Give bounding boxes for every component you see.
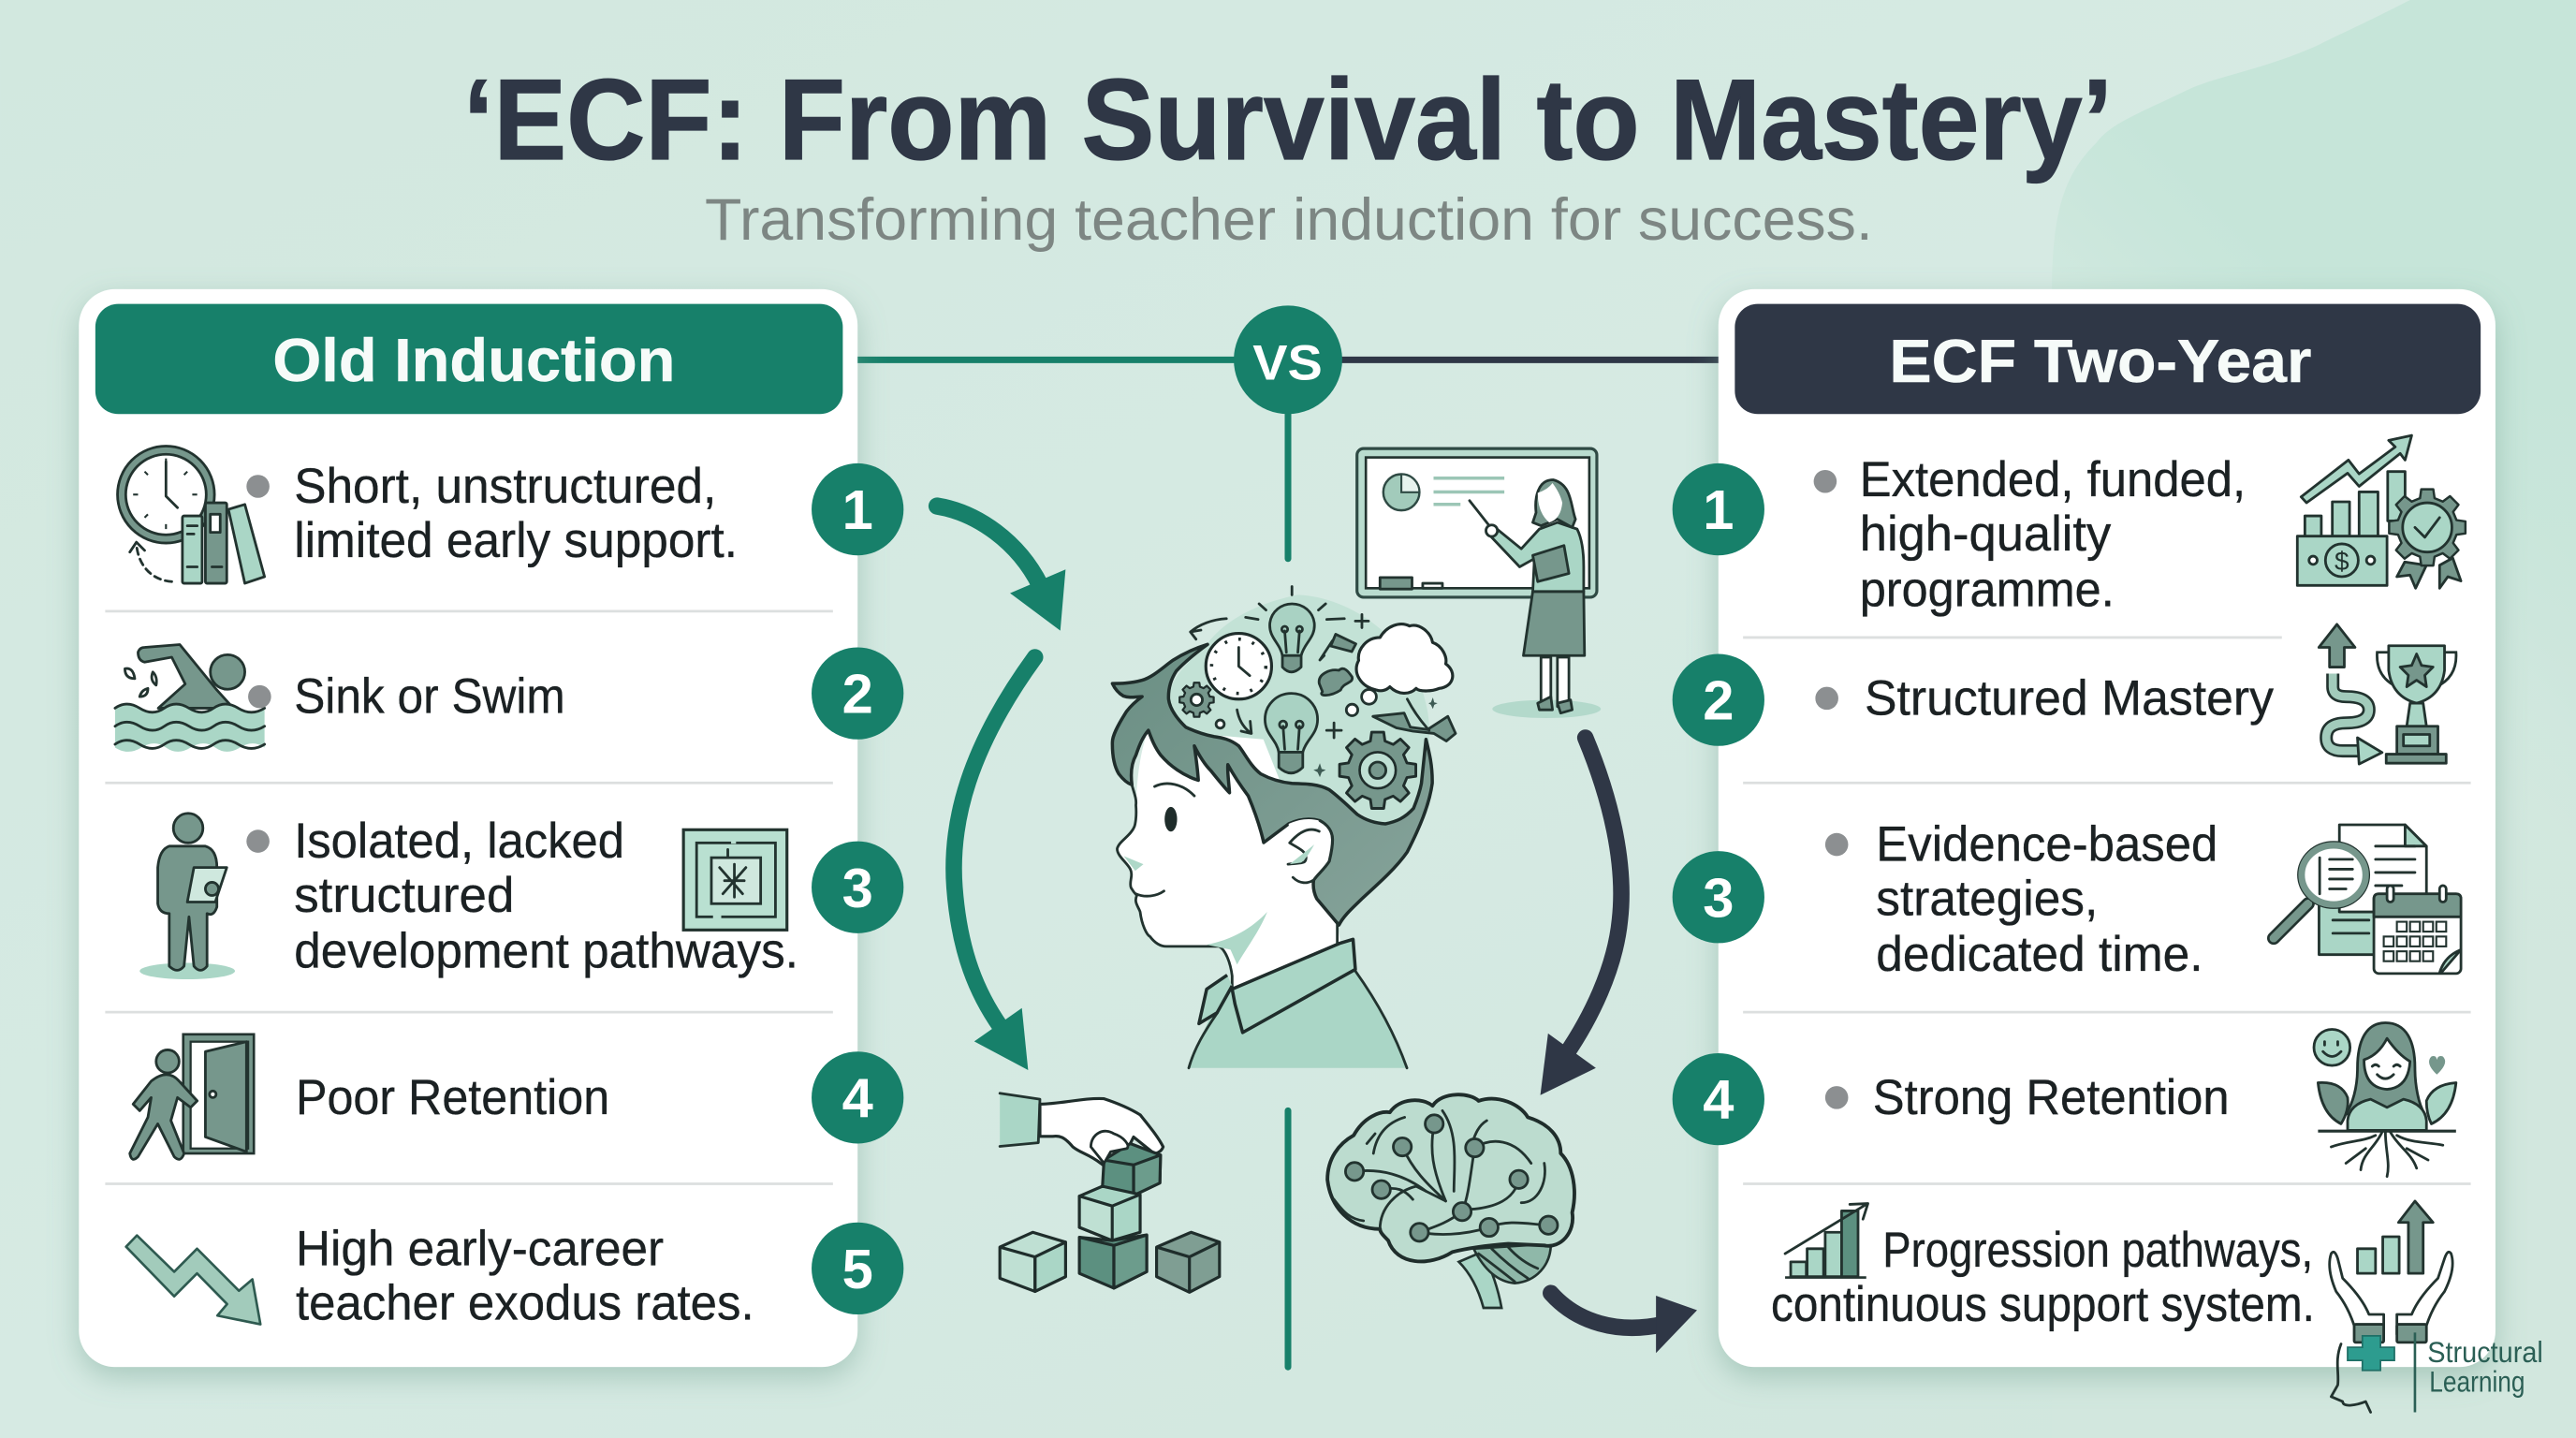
cube: lower middle: [1079, 1235, 1147, 1288]
number badges: old induction: 4: [842, 1066, 873, 1129]
dividers: [1743, 638, 2471, 1183]
text: item 3: Isolated, lacked: [294, 814, 624, 869]
illustration: brain: [1327, 1094, 1574, 1308]
head: shirt: [1189, 923, 1407, 1068]
number badges: ecf two-year: 2: [1703, 669, 1734, 732]
bullet: [1825, 833, 1848, 856]
illustration: teacher at whiteboard: [1357, 448, 1601, 718]
text: item 3: structured: [294, 868, 514, 923]
icon: flag and scatter: [1191, 619, 1456, 777]
icon: door exit: [130, 1034, 254, 1159]
text: item 1: Extended, funded,: [1860, 452, 2246, 507]
subtitle: Transforming teacher induction for success.: [705, 187, 1873, 253]
bullet: [246, 829, 270, 853]
icon: small growth chart: [1785, 1204, 1868, 1278]
text: item 3: strategies,: [1876, 872, 2098, 927]
head: face line: [1117, 785, 1232, 990]
number badges: old induction: 3: [842, 857, 873, 919]
icon: clock and books: [118, 446, 265, 583]
text: item 3: dedicated time.: [1876, 927, 2203, 982]
icon: clock in head: [1206, 634, 1271, 699]
heading: old induction: Old Induction: [272, 326, 675, 394]
number badges: ecf two-year: 3: [1703, 866, 1734, 929]
number badges: ecf two-year: 4: [1703, 1068, 1734, 1131]
icon: teacher rooted: [2314, 1023, 2456, 1177]
head: face: [1117, 729, 1340, 996]
text: item 2: Structured Mastery: [1865, 670, 2275, 726]
text: item 4: Poor Retention: [296, 1070, 609, 1125]
head: ear: [1288, 819, 1332, 883]
illustration: head with ideas: [1112, 587, 1456, 1068]
arrow: head to blocks: [954, 657, 1035, 1070]
logo: structural learning: [2331, 1332, 2543, 1412]
icon: pathway and trophy: [2319, 624, 2456, 764]
number badges: old induction: [812, 463, 903, 1314]
cube: left: [1000, 1232, 1065, 1291]
text: item 5: continuous support system.: [1771, 1277, 2315, 1332]
cube: right: [1157, 1232, 1220, 1292]
bullet: [1814, 470, 1837, 493]
cube: top: [1103, 1143, 1161, 1196]
number badges: old induction: 2: [842, 663, 873, 726]
bullet: [1815, 687, 1838, 710]
icon: funding and quality: $: [2334, 547, 2349, 576]
text: item 1: limited early support.: [294, 513, 738, 568]
bullet: [246, 475, 270, 498]
logo: structural learning: Learning: [2429, 1365, 2525, 1399]
number badges: ecf two-year: [1673, 463, 1764, 1145]
number badges: old induction: 5: [842, 1238, 873, 1300]
dividers: [105, 611, 833, 1183]
icon: research and calendar: [2274, 825, 2461, 974]
icon: isolated person: [139, 814, 235, 979]
heading: ecf two-year: [1734, 304, 2481, 414]
text: item 1: Short, unstructured,: [294, 459, 716, 514]
text: item 2: Sink or Swim: [294, 669, 565, 725]
icon: funding and quality: [2297, 435, 2466, 588]
icon: cloud: [1356, 624, 1453, 693]
vs badge: VS: [1252, 335, 1323, 390]
icon: falling arrow: [126, 1236, 260, 1325]
text: item 5: High early-career: [296, 1221, 664, 1276]
panel: old induction: [79, 289, 857, 1367]
text: item 1: high-quality: [1860, 506, 2112, 562]
icon: small gear: [1179, 682, 1214, 717]
icon: lower bulb: [1265, 694, 1318, 773]
text: item 3: development pathways.: [294, 924, 798, 979]
head: hair: [1112, 644, 1432, 925]
heading: old induction: [95, 304, 842, 414]
text: item 1: programme.: [1860, 563, 2115, 618]
number badges: ecf two-year: 1: [1703, 478, 1734, 541]
text: item 3: Evidence-based: [1876, 817, 2217, 873]
icon: swimmer: [115, 644, 265, 752]
text: item 5: Progression pathways,: [1882, 1223, 2313, 1278]
bullet: [248, 685, 271, 708]
head: features: [1123, 784, 1267, 964]
vs badge: [1234, 305, 1342, 414]
title: ‘ECF: From Survival to Mastery’: [463, 56, 2113, 184]
text: item 5: teacher exodus rates.: [296, 1275, 754, 1330]
arrow: old to head: [937, 506, 1065, 631]
panel: ecf two-year: [1719, 289, 2496, 1367]
heading: ecf two-year: ECF Two-Year: [1889, 327, 2311, 395]
number badges: old induction: 1: [842, 478, 873, 541]
head: mint thought area: [1168, 594, 1429, 823]
icon: maze: [683, 829, 787, 930]
icon: large gear: [1339, 732, 1416, 809]
connector lines: [855, 360, 1721, 1367]
arrow: teacher to brain: [1541, 738, 1621, 1095]
illustration: hand and blocks: [1000, 1093, 1220, 1292]
bullet: [1825, 1086, 1848, 1109]
logo: structural learning: Structural: [2427, 1335, 2543, 1369]
arrow: brain to ecf: [1551, 1293, 1697, 1353]
cube: middle: [1079, 1186, 1140, 1240]
icon: supporting hands: [2330, 1201, 2452, 1343]
text: item 4: Strong Retention: [1873, 1070, 2230, 1125]
icon: top bulb: [1246, 587, 1368, 672]
